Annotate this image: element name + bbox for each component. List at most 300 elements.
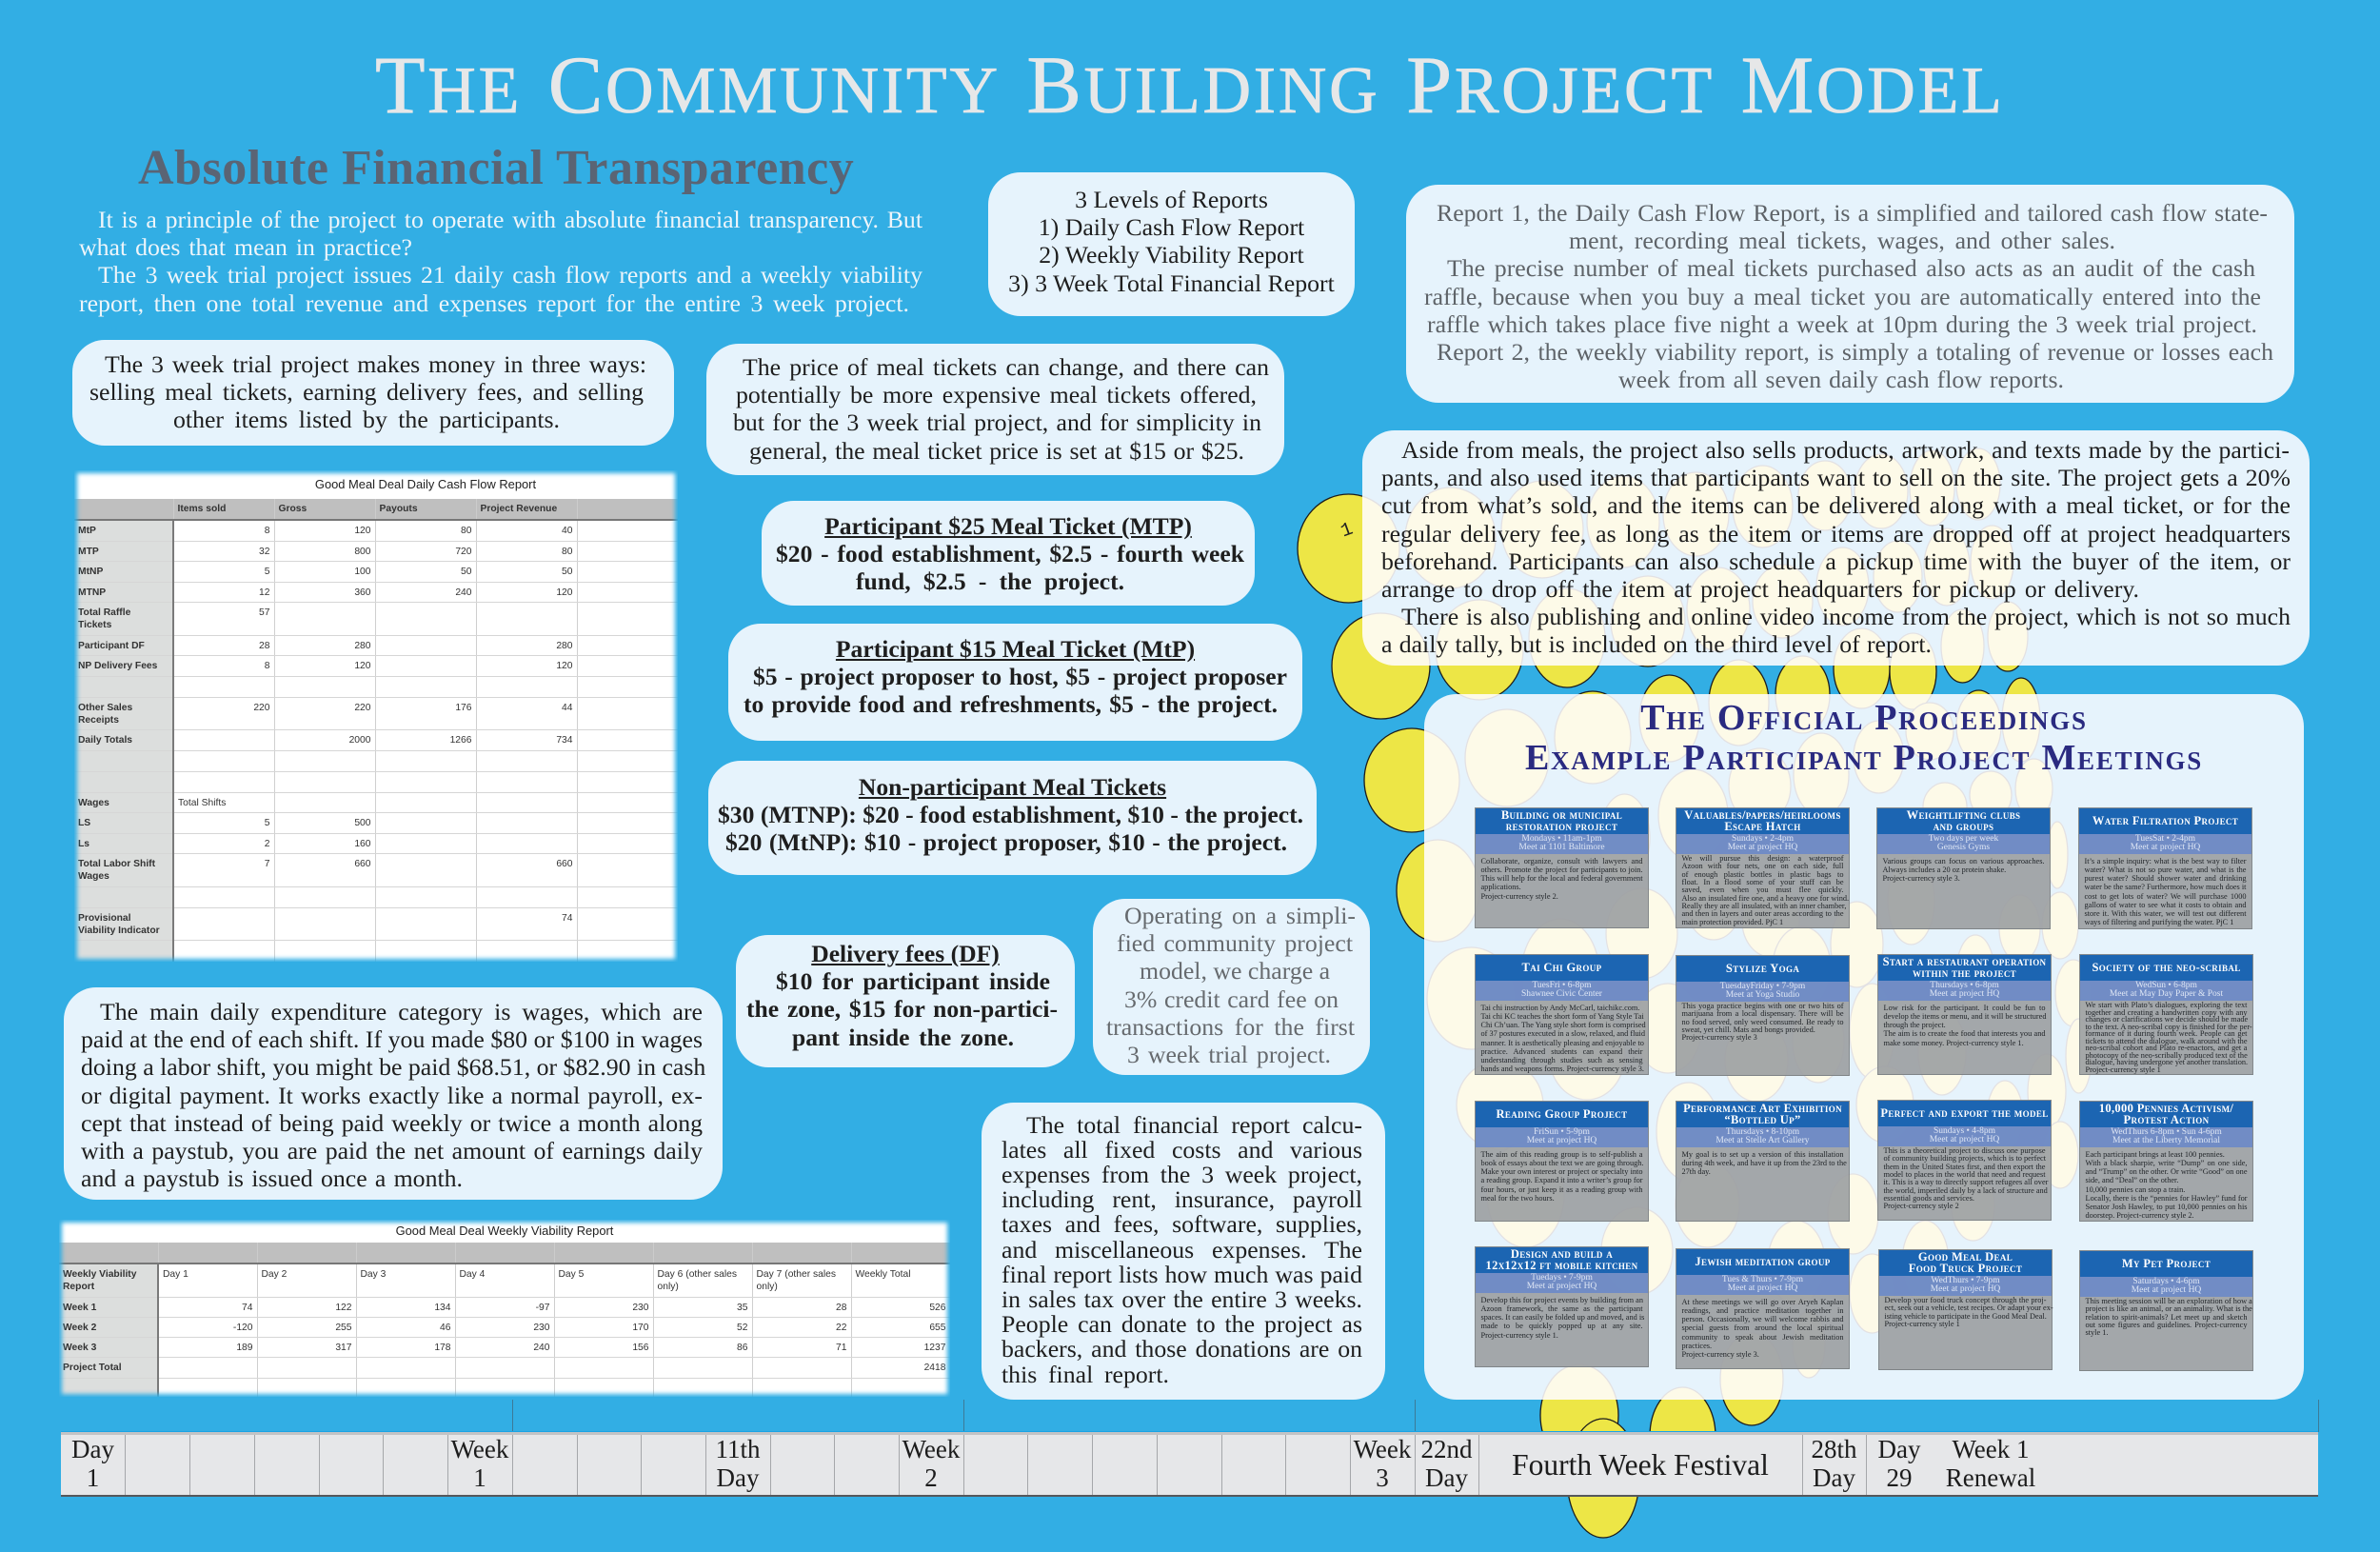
- chart: weekly viability report table: 230: [533, 1322, 550, 1333]
- chart: daily cash flow report table: MTP: [78, 547, 99, 556]
- panel: 3 levels of reports: 3) 3 Week Total Financial Report: [1008, 269, 1335, 297]
- panel: meal ticket price: potentially be more expensive meal tickets offered,: [736, 381, 1257, 408]
- panel: three ways of making money: other items listed by the participants.: [173, 406, 560, 433]
- panel: total financial report: expenses from the 3 week project,: [1002, 1161, 1362, 1188]
- chart: weekly viability report table: 178: [434, 1343, 451, 1352]
- card: society of the neo-scribal: Society of the neo-scribal: [2092, 961, 2241, 974]
- chart: weekly viability report table: Week 1: [63, 1303, 96, 1312]
- card: water filtration: It’s a simple inquiry: what is the best way to filter: [2085, 857, 2247, 866]
- panel: delivery fees: the zone, $15 for non-partici-: [746, 995, 1058, 1023]
- card: society of the neo-scribal: formance of it during fourth week. People can get: [2085, 1029, 2247, 1038]
- card: society of the neo-scribal: neo-scribal cohort and Plato re-enactors, and get a: [2085, 1044, 2247, 1052]
- panel: report 1 description: [1406, 185, 2294, 403]
- panel: aside from meals: beforehand. Participants can also schedule a pickup time with the buyer of the item, or: [1381, 547, 2291, 575]
- card: tai chi group: Chi Ch’uan. The Yang style short form is comprised: [1481, 1021, 1646, 1029]
- panel: wages: paid at the end of each shift. If you made $80 or $100 in wages: [81, 1025, 703, 1053]
- chart: weekly viability report table: Day 3: [360, 1269, 386, 1280]
- chart: weekly viability report table: 22: [836, 1322, 847, 1333]
- chart: daily cash flow report table: 80: [562, 547, 573, 556]
- card: building or municipal restoration: Project-currency style 2.: [1481, 892, 1558, 901]
- card: performance art exhibition: during 4th week, and have it up from the 23rd to the: [1681, 1159, 1847, 1167]
- chart: daily cash flow report table: 50: [461, 567, 472, 577]
- timeline: 4 week calendar strip: 1: [87, 1462, 99, 1491]
- card: perfect and export the model: Perfect and export the model: [1880, 1106, 2049, 1120]
- chart: daily cash flow report table: 280: [354, 641, 371, 651]
- card: tai chi group: Tai Chi Group: [1522, 961, 1601, 974]
- chart: weekly viability report table: Week 3: [63, 1343, 96, 1352]
- chart: daily cash flow report table: 44: [562, 703, 573, 713]
- card: perfect and export the model: [1877, 1100, 2052, 1221]
- chart: daily cash flow report table: 100: [354, 567, 371, 577]
- card: design and build mobile kitchen: Tuedays • 7-9pm: [1531, 1272, 1593, 1282]
- card: stylize yoga: marijuana from a local dispensary. There will be: [1681, 1009, 1843, 1018]
- chart: weekly viability report table: 35: [737, 1303, 748, 1312]
- panel: delivery fees: pant inside the zone.: [792, 1024, 1014, 1051]
- chart: daily cash flow report table: Other Sales: [78, 703, 132, 713]
- card: start a restaurant: [1877, 954, 2052, 1075]
- card: water filtration: TuesSat • 2-4pm: [2135, 834, 2195, 844]
- panel: wages: and a paystub is issued once a month.: [81, 1164, 463, 1192]
- panel: report 1 description: Report 2, the weekly viability report, is simply a totaling of revenue or losses each: [1437, 338, 2273, 366]
- card: perfect and export the model: of community building projects, which is to perfect: [1883, 1154, 2046, 1163]
- chart: daily cash flow report table: Items sold: [177, 504, 226, 514]
- card: society of the neo-scribal: Project-currency style 1: [2085, 1065, 2161, 1074]
- panel: delivery fees: [736, 935, 1075, 1067]
- card: my pet project: [2079, 1250, 2253, 1371]
- card: water filtration: ways of filtering and purifying the water. PjC 1: [2085, 918, 2233, 926]
- panel: 3 levels of reports: 2) Weekly Viability Report: [1039, 241, 1304, 269]
- chart: weekly viability report table: Day 7 (other sales: [756, 1269, 836, 1280]
- card: reading group project: book of essays about the text we are going through.: [1481, 1159, 1643, 1167]
- panel: three ways of making money: [72, 340, 674, 446]
- panel: delivery fees: Delivery fees (DF): [811, 940, 1000, 967]
- chart: daily cash flow report table: 80: [461, 526, 472, 536]
- chart: daily cash flow report table: MtNP: [78, 567, 103, 577]
- card: performance art exhibition: Thursdays • 8-10pm: [1726, 1127, 1799, 1137]
- card: reading group project: four hours, or just keep it as a reading group with: [1481, 1185, 1643, 1194]
- chart: weekly viability report table: Day 1: [163, 1269, 188, 1280]
- chart: daily cash flow report table: 240: [455, 587, 472, 598]
- card: start a restaurant: through the project.: [1883, 1021, 1946, 1029]
- chart: daily cash flow report table: NP Delivery Fees: [78, 661, 157, 671]
- card: good meal deal food truck: WedThurs • 7-9pm: [1931, 1276, 2000, 1285]
- chart: weekly viability report table: 230: [632, 1303, 649, 1312]
- card: tai chi group: practice. Advanced students can expand their: [1481, 1047, 1643, 1056]
- card: stylize yoga: Stylize Yoga: [1726, 962, 1799, 975]
- panel: wages: [64, 987, 723, 1200]
- card: society of the neo-scribal: [2079, 954, 2253, 1075]
- chart: weekly viability report table: 1237: [924, 1343, 946, 1352]
- chart: weekly viability report table: 317: [335, 1343, 352, 1352]
- chart: daily cash flow report table: [74, 470, 678, 962]
- card: water filtration: water be the same? Furthermore, how much does it: [2085, 883, 2247, 891]
- card: building or municipal restoration: restoration project: [1506, 820, 1617, 833]
- intro text block: It is a principle of the project to operate with absolute financial transparency. But: [98, 206, 922, 233]
- card: jewish meditation group: practices.: [1681, 1342, 1712, 1350]
- card: building or municipal restoration: This will help for the local and federal government: [1481, 874, 1643, 883]
- card: my pet project: style 1.: [2085, 1328, 2108, 1337]
- panel: non-participant meal tickets: $30 (MTNP): $20 - food establishment, $10 - the project.: [718, 801, 1303, 828]
- chart: weekly viability report table: 526: [929, 1303, 946, 1312]
- card: start a restaurant: Low risk for the participant. It could be fun to: [1883, 1004, 2045, 1012]
- card: stylize yoga: Project-currency style 3: [1681, 1033, 1757, 1042]
- card: design and build mobile kitchen: Azoon framework, the same as the participant: [1481, 1304, 1643, 1313]
- panel: wages: cept that instead of being paid weekly or twice a month along: [81, 1109, 703, 1137]
- panel: aside from meals: a daily tally, but is included on the third level of report.: [1381, 630, 1932, 658]
- timeline: 4 week calendar strip: 3: [1376, 1462, 1389, 1491]
- panel: participant $25 meal ticket: Participant $25 Meal Ticket (MTP): [824, 512, 1192, 540]
- heading: absolute financial transparency: Absolute Financial Transparency: [138, 141, 854, 195]
- card: performance art exhibition: My goal is to set up a version of this installation: [1681, 1150, 1843, 1159]
- card: 10,000 pennies activism: WedThurs 6-8pm • Sun 4-6pm: [2111, 1127, 2222, 1137]
- card: my pet project: Meet at project HQ: [2132, 1285, 2201, 1295]
- card: good meal deal food truck: Food Truck Project: [1909, 1262, 2022, 1275]
- chart: daily cash flow report table: Ls: [78, 838, 89, 849]
- chart: daily cash flow report table: 50: [562, 567, 573, 577]
- chart: weekly viability report table: Good Meal Deal Weekly Viability Report: [396, 1224, 613, 1238]
- chart: weekly viability report table: -120: [233, 1322, 253, 1333]
- panel: three ways of making money: The 3 week trial project makes money in three ways:: [105, 350, 646, 378]
- chart: daily cash flow report table: 720: [455, 547, 472, 556]
- panel: report 1 description: week from all seven daily cash flow reports.: [1618, 366, 2064, 393]
- timeline: 4 week calendar strip: 22nd: [1420, 1435, 1472, 1463]
- chart: weekly viability report table: 2418: [924, 1362, 946, 1373]
- card: jewish meditation group: person. Occasionally, we will welcome rabbis and: [1681, 1315, 1843, 1323]
- chart: weekly viability report table: 156: [632, 1343, 649, 1352]
- card: society of the neo-scribal: tickets to attend the dialogue, walk around with the: [2085, 1037, 2247, 1045]
- card: society of the neo-scribal: dialogue, having undergone yet another translation.: [2085, 1058, 2248, 1066]
- panel: non-participant meal tickets: Non-participant Meal Tickets: [859, 773, 1166, 801]
- chart: daily cash flow report table: 660: [354, 859, 371, 869]
- card: jewish meditation group: Meet at project HQ: [1728, 1283, 1797, 1293]
- chart: daily cash flow report table: Participant DF: [78, 641, 145, 651]
- panel: total financial report: [982, 1103, 1385, 1400]
- panel: participant $15 meal ticket: [728, 624, 1302, 741]
- card: water filtration: cost to get lots of water? We will purchase 1000: [2085, 892, 2247, 901]
- card: perfect and export the model: it. This is a way to directly support refugees all over: [1883, 1178, 2048, 1186]
- timeline: 4 week calendar strip: Week 1: [1952, 1435, 2030, 1463]
- card: water filtration: purest water? Should shower water and drinking: [2085, 874, 2247, 883]
- card: jewish meditation group: At these meetings we will go over Aryeh Kaplan: [1681, 1298, 1843, 1306]
- timeline: 4 week calendar strip: Renewal: [1946, 1462, 2035, 1491]
- chart: weekly viability report table: 240: [533, 1343, 550, 1352]
- timeline: 4 week calendar strip: 2: [924, 1462, 938, 1491]
- card: perfect and export the model: Meet at project HQ: [1930, 1135, 1999, 1144]
- intro text block: report, then one total revenue and expenses report for the entire 3 week project.: [79, 289, 909, 317]
- card: building or municipal restoration: Mondays • 11am-1pm: [1521, 834, 1602, 844]
- chart: daily cash flow report table: Daily Totals: [78, 735, 132, 745]
- card: 10,000 pennies activism: Each participant brings at least 100 pennies.: [2085, 1150, 2225, 1159]
- card: weightlifting clubs: Always includes a 20 oz protein shake.: [1883, 866, 2006, 874]
- timeline: 4 week calendar strip: [61, 1432, 2318, 1497]
- chart: weekly viability report table: only): [756, 1282, 778, 1292]
- chart: daily cash flow report table: 8: [265, 661, 270, 671]
- card: jewish meditation group: [1676, 1248, 1850, 1369]
- card: performance art exhibition: Performance Art Exhibition: [1683, 1102, 1842, 1115]
- card: tai chi group: manner. It is aesthetically pleasing and enjoyable to: [1481, 1039, 1644, 1047]
- card: valuables escape hatch: Escape Hatch: [1724, 820, 1801, 833]
- chart: weekly viability report table: 189: [236, 1343, 253, 1352]
- card: tai chi group: [1475, 954, 1649, 1075]
- card: weightlifting clubs: [1876, 807, 2051, 929]
- card: design and build mobile kitchen: spaces. It can easily be folded up and moved, and is: [1481, 1313, 1644, 1322]
- timeline: 4 week calendar strip: Week: [451, 1435, 508, 1463]
- card: performance art exhibition: [1676, 1101, 1850, 1222]
- card: tai chi group: Tai chi instruction by Andy McCarl, taichikc.com.: [1481, 1004, 1639, 1012]
- chart: weekly viability report table: 255: [335, 1322, 352, 1333]
- panel: total financial report: The total financial report calcu-: [1026, 1110, 1362, 1139]
- panel: wages: or digital payment. It works exactly like a normal payroll, ex-: [81, 1082, 703, 1109]
- panel: aside from meals: [1362, 430, 2310, 666]
- chart: weekly viability report table: 71: [836, 1343, 847, 1352]
- panel: credit card fee note: 3 week trial project.: [1127, 1041, 1331, 1068]
- chart: daily cash flow report table: 734: [556, 735, 573, 745]
- card: reading group project: meal for the two hours.: [1481, 1194, 1555, 1203]
- panel: wages: The main daily expenditure category is wages, which are: [100, 998, 703, 1025]
- chart: daily cash flow report table: 120: [354, 526, 371, 536]
- chart: weekly viability report table: 122: [335, 1303, 352, 1312]
- card: stylize yoga: Meet at Yoga Studio: [1726, 990, 1799, 1000]
- chart: daily cash flow report table: Tickets: [78, 620, 111, 630]
- card: society of the neo-scribal: together and creating a handwritten copy with any: [2085, 1008, 2247, 1017]
- card: start a restaurant: make some money. Project-currency style 1.: [1883, 1039, 2024, 1047]
- card: reading group project: FriSun • 5-9pm: [1534, 1127, 1590, 1137]
- card: my pet project: This meeting session will be an exploration of how a: [2085, 1297, 2252, 1305]
- card: design and build mobile kitchen: Project-currency style 1.: [1481, 1331, 1558, 1340]
- card: tai chi group: of 37 postures executed in a slow, relaxed, and fluid: [1481, 1029, 1645, 1038]
- chart: daily cash flow report table: Project Revenue: [480, 504, 557, 514]
- card: valuables escape hatch: float. In a flood some of your stuff can be: [1681, 878, 1843, 886]
- chart: daily cash flow report table: 40: [562, 526, 573, 536]
- card: start a restaurant: Start a restaurant operation: [1883, 955, 2046, 968]
- chart: daily cash flow report table: 74: [562, 912, 573, 924]
- panel: meal ticket price: The price of meal tickets can change, and there can: [743, 353, 1269, 381]
- card: tai chi group: Tai chi KC teaches the short form of Yang Style Tai: [1481, 1012, 1644, 1021]
- panel: total financial report: backers, and those donations are on: [1002, 1335, 1362, 1363]
- chart: daily cash flow report table: 120: [354, 661, 371, 671]
- panel: total financial report: in sales tax over the entire 3 weeks.: [1002, 1285, 1362, 1313]
- card: valuables escape hatch: Azoon with four nets, one on each side, full: [1681, 862, 1843, 870]
- card: good meal deal food truck: ect, seek out a vehicle, test recipes. Or adapt your ex-: [1885, 1303, 2053, 1312]
- chart: daily cash flow report table: 7: [265, 859, 270, 869]
- chart: daily cash flow report table: 660: [556, 859, 573, 869]
- panel: report 1 description: raffle, because when you buy a meal ticket you are automatically entered into the: [1424, 283, 2261, 310]
- card: good meal deal food truck: [1878, 1249, 2053, 1370]
- card: reading group project: [1475, 1101, 1649, 1222]
- card: valuables escape hatch: of enough plastic bottles in plastic bags to: [1681, 870, 1843, 879]
- panel: credit card fee note: [1093, 899, 1370, 1075]
- chart: daily cash flow report table: 120: [556, 587, 573, 598]
- chart: weekly viability report table: Report: [63, 1282, 94, 1292]
- card: stylize yoga: TuesdayFriday • 7-9pm: [1720, 981, 1805, 990]
- chart: daily cash flow report table: 220: [253, 703, 270, 713]
- panel: participant $15 meal ticket: $5 - project proposer to host, $5 - project proposer: [753, 663, 1287, 690]
- chart: daily cash flow report table: 160: [354, 838, 371, 849]
- chart: daily cash flow report table: 360: [354, 587, 371, 598]
- panel: credit card fee note: 3% credit card fee on: [1124, 985, 1339, 1013]
- chart: daily cash flow report table: Viability Indicator: [78, 925, 160, 935]
- timeline: 4 week calendar strip: 11th: [716, 1435, 760, 1463]
- card: reading group project: a reading group. Expand it into a writer’s group for: [1481, 1176, 1643, 1184]
- card: design and build mobile kitchen: [1475, 1246, 1649, 1367]
- chart: weekly viability report table: Day 6 (other sales: [657, 1269, 737, 1280]
- card: valuables escape hatch: Also an insulated fire one, and a heavy one for wind.: [1681, 894, 1849, 903]
- card: perfect and export the model: them in the United States first, and then export the: [1883, 1163, 2045, 1171]
- card: 10,000 pennies activism: Senator Josh Hawley, to put 10,000 pennies on his: [2085, 1203, 2247, 1211]
- chart: weekly viability report table: 74: [242, 1303, 253, 1312]
- card: 10,000 pennies activism: With a black sharpie, write “Dump” on one side,: [2085, 1159, 2247, 1167]
- card: 10,000 pennies activism: Meet at the Liberty Memorial: [2112, 1136, 2220, 1145]
- panel: report 1 description: raffle which takes place five night a week at 10pm during the 3 week trial project.: [1427, 310, 2257, 338]
- heading: official proceedings: Example Participant Project Meetings: [1525, 738, 2203, 778]
- chart: daily cash flow report table: Wages: [78, 798, 109, 807]
- card: valuables escape hatch: main protection provided. PjC 1: [1681, 918, 1783, 926]
- chart: daily cash flow report table: LS: [78, 818, 90, 828]
- card: reading group project: Make your own interest or project or specialty into: [1481, 1167, 1643, 1176]
- panel: total financial report: including rent, insurance, payroll: [1002, 1185, 1362, 1213]
- card: valuables escape hatch: We will pursue this design: a waterproof: [1681, 854, 1843, 863]
- panel: aside from meals: regular delivery fee, as long as the item or items are dropped off at project headquarters: [1381, 520, 2291, 547]
- card: reading group project: Reading Group Project: [1497, 1107, 1628, 1121]
- chart: daily cash flow report table: Receipts: [78, 715, 119, 726]
- chart: weekly viability report table: 655: [929, 1322, 946, 1333]
- timeline: 4 week calendar strip: 1: [473, 1462, 486, 1491]
- card: design and build mobile kitchen: 12x12x12 ft mobile kitchen: [1485, 1259, 1637, 1272]
- panel: wages: with a paystub, you are paid the net amount of earnings daily: [81, 1137, 703, 1164]
- chart: daily cash flow report table: 800: [354, 547, 371, 556]
- chart: daily cash flow report table: 220: [354, 703, 371, 713]
- card: 10,000 pennies activism: 10,000 pennies can stop a train.: [2085, 1185, 2185, 1194]
- card: valuables escape hatch: Sundays • 2-4pm: [1732, 834, 1794, 844]
- heading: official proceedings: [1525, 698, 2203, 778]
- panel: participant $25 meal ticket: [762, 501, 1255, 606]
- card: design and build mobile kitchen: Develop this for project events by building from an: [1481, 1296, 1643, 1304]
- chart: weekly viability report table: 52: [737, 1322, 748, 1333]
- intro text block: The 3 week trial project issues 21 daily cash flow reports and a weekly viability: [98, 261, 922, 289]
- panel: credit card fee note: fied community project: [1117, 929, 1353, 957]
- card: good meal deal food truck: Good Meal Deal: [1918, 1250, 2013, 1263]
- card: good meal deal food truck: isting vehicle to participate in the Good Meal Deal.: [1885, 1312, 2047, 1321]
- panel: 3 levels of reports: [988, 172, 1355, 316]
- panel: aside from meals: arrange to drop off the item at project headquarters for pickup or delivery.: [1381, 575, 2139, 603]
- card: weightlifting clubs: Project-currency style 3.: [1883, 874, 1960, 883]
- card: valuables escape hatch: [1676, 807, 1850, 928]
- timeline: 4 week calendar strip: Day: [1813, 1462, 1855, 1491]
- card: start a restaurant: Thursdays • 6-8pm: [1930, 981, 1999, 990]
- panel: non-participant meal tickets: $20 (MtNP): $10 - project proposer, $10 - the project.: [725, 828, 1287, 856]
- chart: daily cash flow report table: 57: [259, 607, 270, 618]
- card: jewish meditation group: Project-currency style 3.: [1681, 1350, 1759, 1359]
- title: The Community Building Project Model: [375, 28, 2005, 133]
- chart: weekly viability report table: 28: [836, 1303, 847, 1312]
- timeline: 4 week calendar strip: 29: [1887, 1462, 1912, 1491]
- panel: three ways of making money: selling meal tickets, earning delivery fees, and selling: [89, 378, 644, 406]
- card: start a restaurant: The aim is to create the food that interests you and: [1883, 1029, 2045, 1038]
- panel: aside from meals: cut from what’s sold, and the items can be delivered along with a meal ticket, or for the: [1381, 491, 2291, 519]
- chart: weekly viability report table: only): [657, 1282, 679, 1292]
- card: 10,000 pennies activism: 10,000 Pennies Activism/: [2099, 1102, 2233, 1115]
- card: valuables escape hatch: Really they are all insulated, with an inner chamber,: [1681, 902, 1846, 910]
- panel: aside from meals: There is also publishing and online video income from the project, which is not so much: [1401, 603, 2291, 630]
- chart: daily cash flow report table: MTNP: [78, 587, 106, 598]
- timeline: 4 week calendar strip: Week: [1354, 1435, 1411, 1463]
- card: water filtration: Water Filtration Project: [2092, 814, 2238, 827]
- timeline: 4 week calendar strip: Day: [1877, 1435, 1920, 1463]
- panel: report 1 description: Report 1, the Daily Cash Flow Report, is a simplified and tailored cash flow state-: [1437, 199, 2268, 227]
- panel: credit card fee note: Operating on a simpli-: [1124, 902, 1356, 929]
- card: society of the neo-scribal: WedSun • 6-8pm: [2135, 981, 2197, 990]
- panel: total financial report: this final report.: [1002, 1361, 1169, 1388]
- card: water filtration: gallons of water to see what it costs to obtain and: [2085, 901, 2247, 909]
- panel: delivery fees: $10 for participant inside: [776, 967, 1050, 995]
- chart: daily cash flow report table: Total Shifts: [178, 798, 226, 807]
- chart: daily cash flow report table: Gross: [278, 504, 307, 514]
- chart: weekly viability report table: [59, 1220, 950, 1397]
- panel: meal ticket price: general, the meal ticket price is set at $15 or $25.: [749, 437, 1244, 465]
- card: water filtration: store it. With this water, we will test out different: [2085, 909, 2247, 918]
- panel: aside from meals: Aside from meals, the project also sells products, artwork, and texts made by the partici-: [1401, 436, 2290, 464]
- card: stylize yoga: sweat, yet chill. Mats and bongs provided.: [1681, 1025, 1815, 1034]
- card: my pet project: My Pet Project: [2122, 1257, 2211, 1270]
- card: reading group project: Meet at project HQ: [1527, 1136, 1597, 1145]
- chart: daily cash flow report table: 500: [354, 818, 371, 828]
- panel: total financial report: lates all fixed costs and various: [1002, 1136, 1362, 1164]
- card: building or municipal restoration: Collaborate, organize, consult with lawyers and: [1481, 857, 1643, 866]
- card: good meal deal food truck: Develop your food truck concept through the proj-: [1885, 1296, 2047, 1304]
- card: tai chi group: understanding through studies such as sensing: [1481, 1056, 1643, 1065]
- panel: report 1 description: ment, recording meal tickets, wages, and other sales.: [1569, 227, 2115, 254]
- card: perfect and export the model: model to places in the world that need and request: [1883, 1170, 2045, 1179]
- card: perfect and export the model: Sundays • 4-8pm: [1934, 1125, 1995, 1135]
- panel: the official proceedings: [1424, 694, 2304, 1400]
- card: start a restaurant: Meet at project HQ: [1930, 989, 1999, 999]
- chart: weekly viability report table: Day 4: [459, 1269, 485, 1280]
- card: stylize yoga: [1676, 955, 1850, 1076]
- card: valuables escape hatch: Valuables/papers/heirlooms: [1684, 808, 1841, 822]
- heading: official proceedings: The Official Proceedings: [1640, 698, 2088, 738]
- chart: daily cash flow report table: 2000: [349, 735, 371, 745]
- chart: weekly viability report table: 86: [737, 1343, 748, 1352]
- chart: weekly viability report table: Week 2: [63, 1322, 96, 1333]
- card: valuables escape hatch: saved, even when you must flee quickly.: [1681, 885, 1843, 894]
- panel: total financial report: and miscellaneous expenses. The: [1002, 1236, 1362, 1263]
- card: stylize yoga: This yoga practice begins with one or two hits of: [1681, 1002, 1843, 1010]
- card: jewish meditation group: community to speak about Jewish meditation: [1681, 1333, 1843, 1342]
- chart: daily cash flow report table: MtP: [78, 526, 96, 536]
- chart: daily cash flow report table: 5: [265, 567, 270, 577]
- chart: daily cash flow report table: Good Meal Deal Daily Cash Flow Report: [315, 477, 536, 491]
- card: tai chi group: hands and weapons forms. Project-currency style 3.: [1481, 1065, 1644, 1073]
- card: stylize yoga: no food served, only weed consumed. Be ready to: [1681, 1018, 1843, 1026]
- panel: aside from meals: pants, and also used items that participants want to sell on the site. The project gets a 20%: [1381, 464, 2291, 491]
- chart: daily cash flow report table: Payouts: [379, 504, 418, 514]
- chart: daily cash flow report table: 176: [455, 703, 472, 713]
- card: building or municipal restoration: applications.: [1481, 883, 1521, 891]
- card: society of the neo-scribal: changes or clarifications we decide should be made: [2085, 1015, 2248, 1024]
- card: building or municipal restoration: Building or municipal: [1501, 808, 1622, 822]
- chart: daily cash flow report table: 5: [265, 818, 270, 828]
- panel: report 1 description: The precise number of meal tickets purchased also acts as an audit of the cash: [1447, 254, 2255, 282]
- chart: daily cash flow report table: 28: [259, 641, 270, 651]
- card: perfect and export the model: Project-currency style 2: [1883, 1202, 1959, 1210]
- card: design and build mobile kitchen: Design and build a: [1511, 1247, 1613, 1261]
- panel: total financial report: taxes and fees, software, supplies,: [1002, 1210, 1362, 1238]
- chart: weekly viability report table: Weekly Total: [855, 1269, 910, 1280]
- card: water filtration: water? What is not so pure water, and what is the: [2085, 866, 2247, 874]
- chart: daily cash flow report table: 8: [265, 526, 270, 536]
- card: society of the neo-scribal: Meet at May Day Paper & Post: [2110, 989, 2223, 999]
- panel: total financial report: People can donate to the project as: [1002, 1310, 1362, 1338]
